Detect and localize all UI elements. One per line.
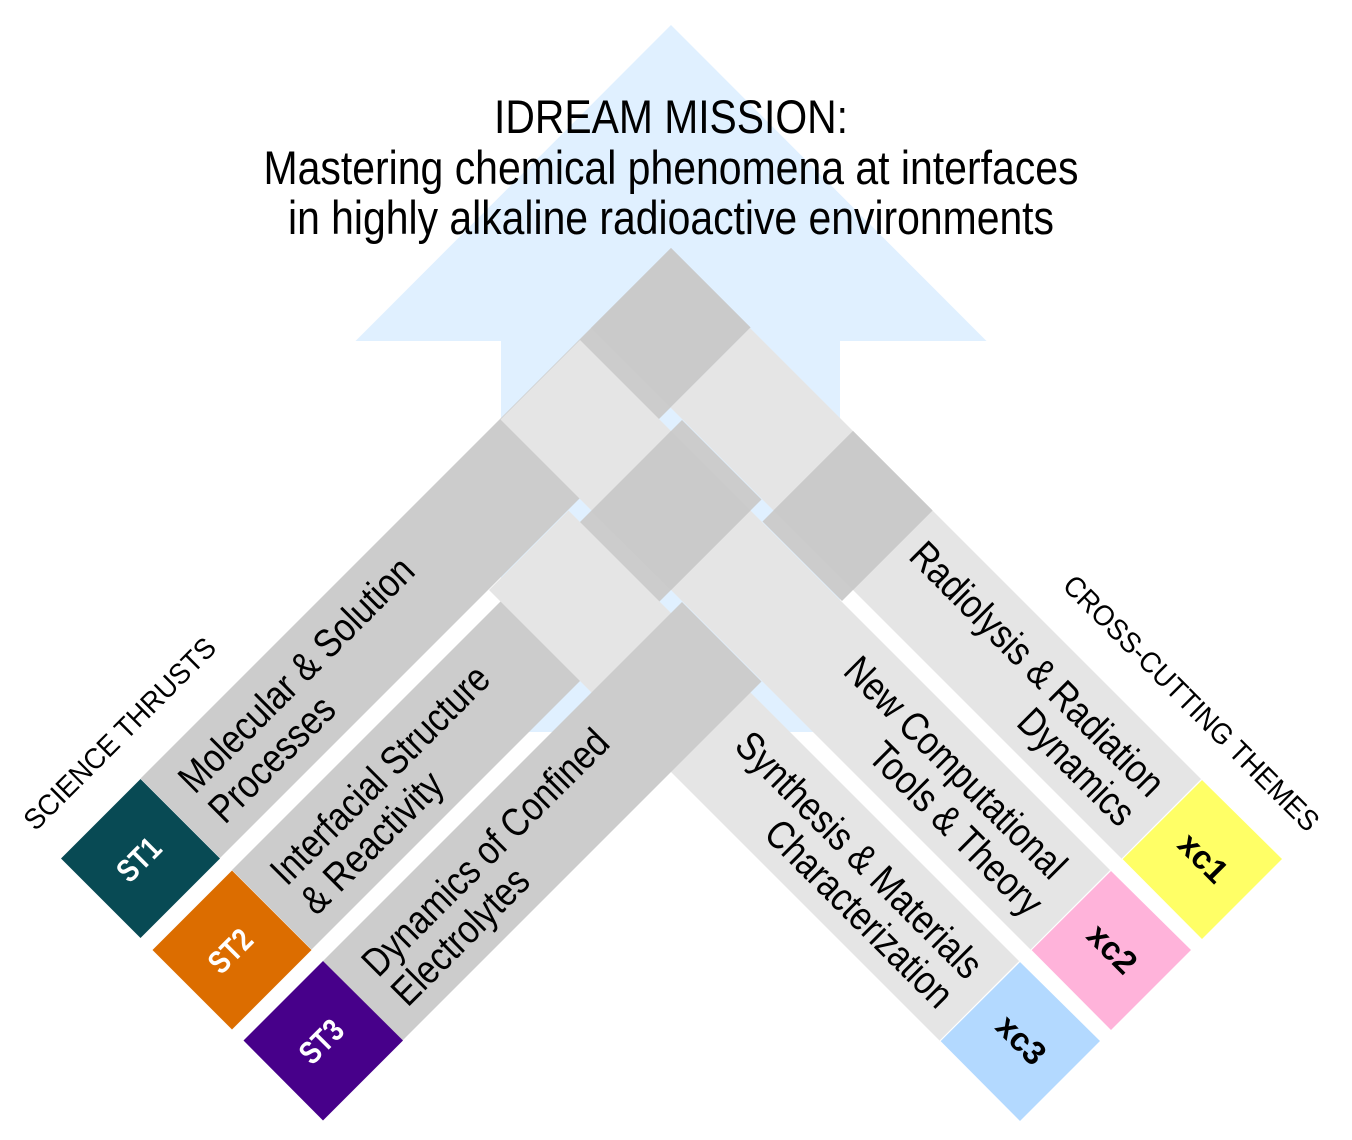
title: IDREAM MISSION: [494,90,848,143]
science thrust 1: ST1 [109,830,168,889]
cross-cutting theme 2: New Computational [835,648,1075,888]
cross-cutting theme 2: Tools & Theory [860,733,1051,925]
cross-cutting theme 3: xc3 [989,1007,1054,1072]
cross-cutting theme 3: Synthesis & Materials [727,723,991,987]
title: Mastering chemical phenomena at interfaces [264,141,1078,194]
label: science thrusts: SCIENCE THRUSTS [18,632,223,837]
cross-cutting theme 1: Radiolysis & Radiation [901,533,1173,805]
science thrust 1: Molecular & Solution [170,548,423,802]
science thrust 3 [244,431,932,1120]
background mission arrow [356,25,986,732]
science thrust 2: ST2 [201,921,260,981]
science thrust 3: Dynamics of Confined [354,721,618,985]
cross-cutting theme 1: Dynamics [1009,700,1144,835]
science thrust 2: & Reactivity [292,763,452,923]
cross-cutting theme 1 [670,328,1282,939]
science thrust 2: Interfacial Structure [262,657,499,893]
title: in highly alkaline radioactive environments [288,191,1054,244]
cross-cutting theme 2 [500,340,1191,1030]
cross-cutting theme 1: xc1 [1171,825,1236,890]
cross-cutting theme 3 [489,510,1100,1121]
science thrust 3: ST3 [292,1012,351,1071]
title [264,90,1078,244]
science thrust 3: Electrolytes [383,859,538,1014]
science thrust 1: Processes [200,687,344,832]
science thrust 2 [152,420,762,1030]
science thrust 1 [61,248,750,938]
cross-cutting theme 2: xc2 [1080,916,1145,981]
label: cross-cutting themes: CROSS-CUTTING THEMES [1056,570,1325,838]
cross-cutting theme 3: Characterization [756,811,962,1017]
